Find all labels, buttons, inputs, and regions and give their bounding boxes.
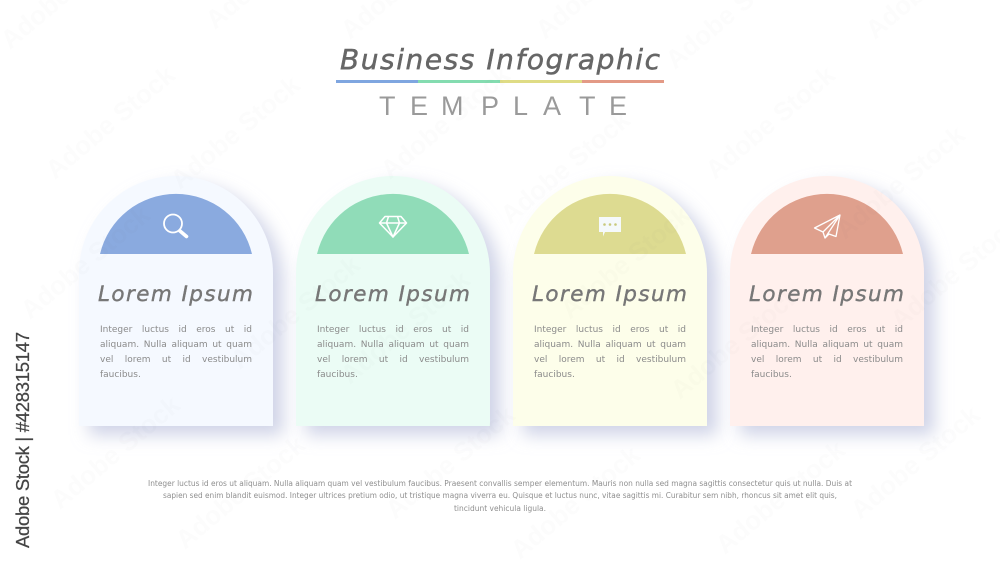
watermark: Adobe Stock bbox=[375, 59, 516, 185]
footer text: Integer luctus id eros ut aliquam. Nulla aliquam quam vel vestibulum faucibus. Praesent convallis semper elementum. Mauris non nulla sed magna sagittis consectetur quis ut nulla. Duis at bbox=[148, 479, 852, 488]
text block: card 3: vel lorem ut id vestibulum bbox=[534, 355, 686, 365]
text block: card 1: faucibus. bbox=[100, 370, 141, 380]
header shape: card 4 bbox=[751, 194, 903, 254]
text block: card 1: aliquam. Nulla aliquam ut quam bbox=[100, 340, 252, 350]
watermark: Adobe Stock bbox=[700, 59, 841, 185]
text block: card 3: aliquam. Nulla aliquam ut quam bbox=[534, 340, 686, 350]
icon: magnifier bbox=[164, 214, 186, 236]
text block: card 3: Integer luctus id eros ut id bbox=[534, 325, 686, 335]
watermark: Adobe Stock bbox=[165, 69, 306, 195]
text block: card 4: aliquam. Nulla aliquam ut quam bbox=[751, 340, 903, 350]
footer text: sapien sed enim blandit euismod. Integer ultrices pretium odio, ut tristique magna viverra eu. Quisque et luctus nunc, vitae sagittis mi. Curabitur sem nibh, rhoncus sit amet elit quis, bbox=[163, 491, 837, 500]
watermark: Adobe Stock bbox=[15, 199, 156, 325]
watermark: Adobe Stock bbox=[225, 249, 366, 375]
icon: speech bubble bbox=[599, 217, 621, 236]
icon: diamond bbox=[380, 216, 406, 237]
panel: card 4 background bbox=[730, 176, 924, 426]
header shape: card 1 bbox=[100, 194, 252, 254]
text block: card 2: faucibus. bbox=[317, 370, 358, 380]
text block: card 2: Integer luctus id eros ut id bbox=[317, 325, 469, 335]
header shape: card 2 bbox=[317, 194, 469, 254]
panel: card 1 background bbox=[79, 176, 273, 426]
text block: card 4: vel lorem ut id vestibulum bbox=[751, 355, 903, 365]
footer text: tincidunt vehicula ligula. bbox=[454, 504, 546, 513]
text block: card 4: faucibus. bbox=[751, 370, 792, 380]
heading: card 4: Lorem Ipsum bbox=[749, 282, 904, 307]
watermark: Adobe Stock bbox=[845, 399, 986, 525]
colored underline bbox=[336, 80, 664, 83]
watermark: Adobe Stock bbox=[45, 389, 186, 515]
text block: card 3 bbox=[534, 325, 686, 380]
footer text bbox=[148, 479, 852, 513]
header shape: card 3 bbox=[534, 194, 686, 254]
title: Business Infographic bbox=[340, 43, 661, 76]
watermark: Adobe Stock bbox=[495, 104, 636, 230]
text block: card 2 bbox=[317, 325, 469, 380]
watermark: Adobe Stock bbox=[710, 434, 851, 560]
text block: card 4 bbox=[751, 325, 903, 380]
watermark: Adobe Stock bbox=[380, 399, 521, 525]
panel: card 3 background bbox=[513, 176, 707, 426]
text block: card 1: vel lorem ut id vestibulum bbox=[100, 355, 252, 365]
panel: card 2 background bbox=[296, 176, 490, 426]
text block: card 3: faucibus. bbox=[534, 370, 575, 380]
heading: card 1: Lorem Ipsum bbox=[98, 282, 253, 307]
subtitle: TEMPLATE bbox=[379, 91, 627, 121]
watermark: Adobe Stock bbox=[665, 279, 806, 405]
icon: paper plane bbox=[814, 215, 840, 238]
watermark: Adobe Stock bbox=[335, 264, 476, 390]
text block: card 4: Integer luctus id eros ut id bbox=[751, 325, 903, 335]
stock id label: Adobe Stock | #428315147 bbox=[12, 332, 33, 548]
watermark: Adobe Stock bbox=[40, 59, 181, 185]
text block: card 2: aliquam. Nulla aliquam ut quam bbox=[317, 340, 469, 350]
heading: card 3: Lorem Ipsum bbox=[532, 282, 687, 307]
text block: card 2: vel lorem ut id vestibulum bbox=[317, 355, 469, 365]
watermark: Adobe Stock bbox=[505, 439, 646, 563]
watermark: Adobe Stock bbox=[170, 429, 311, 555]
text block: card 1 bbox=[100, 325, 252, 380]
text block: card 1: Integer luctus id eros ut id bbox=[100, 325, 252, 335]
heading: card 2: Lorem Ipsum bbox=[315, 282, 470, 307]
watermark: Adobe Stock bbox=[555, 199, 696, 325]
watermark: Adobe Stock bbox=[830, 119, 971, 245]
